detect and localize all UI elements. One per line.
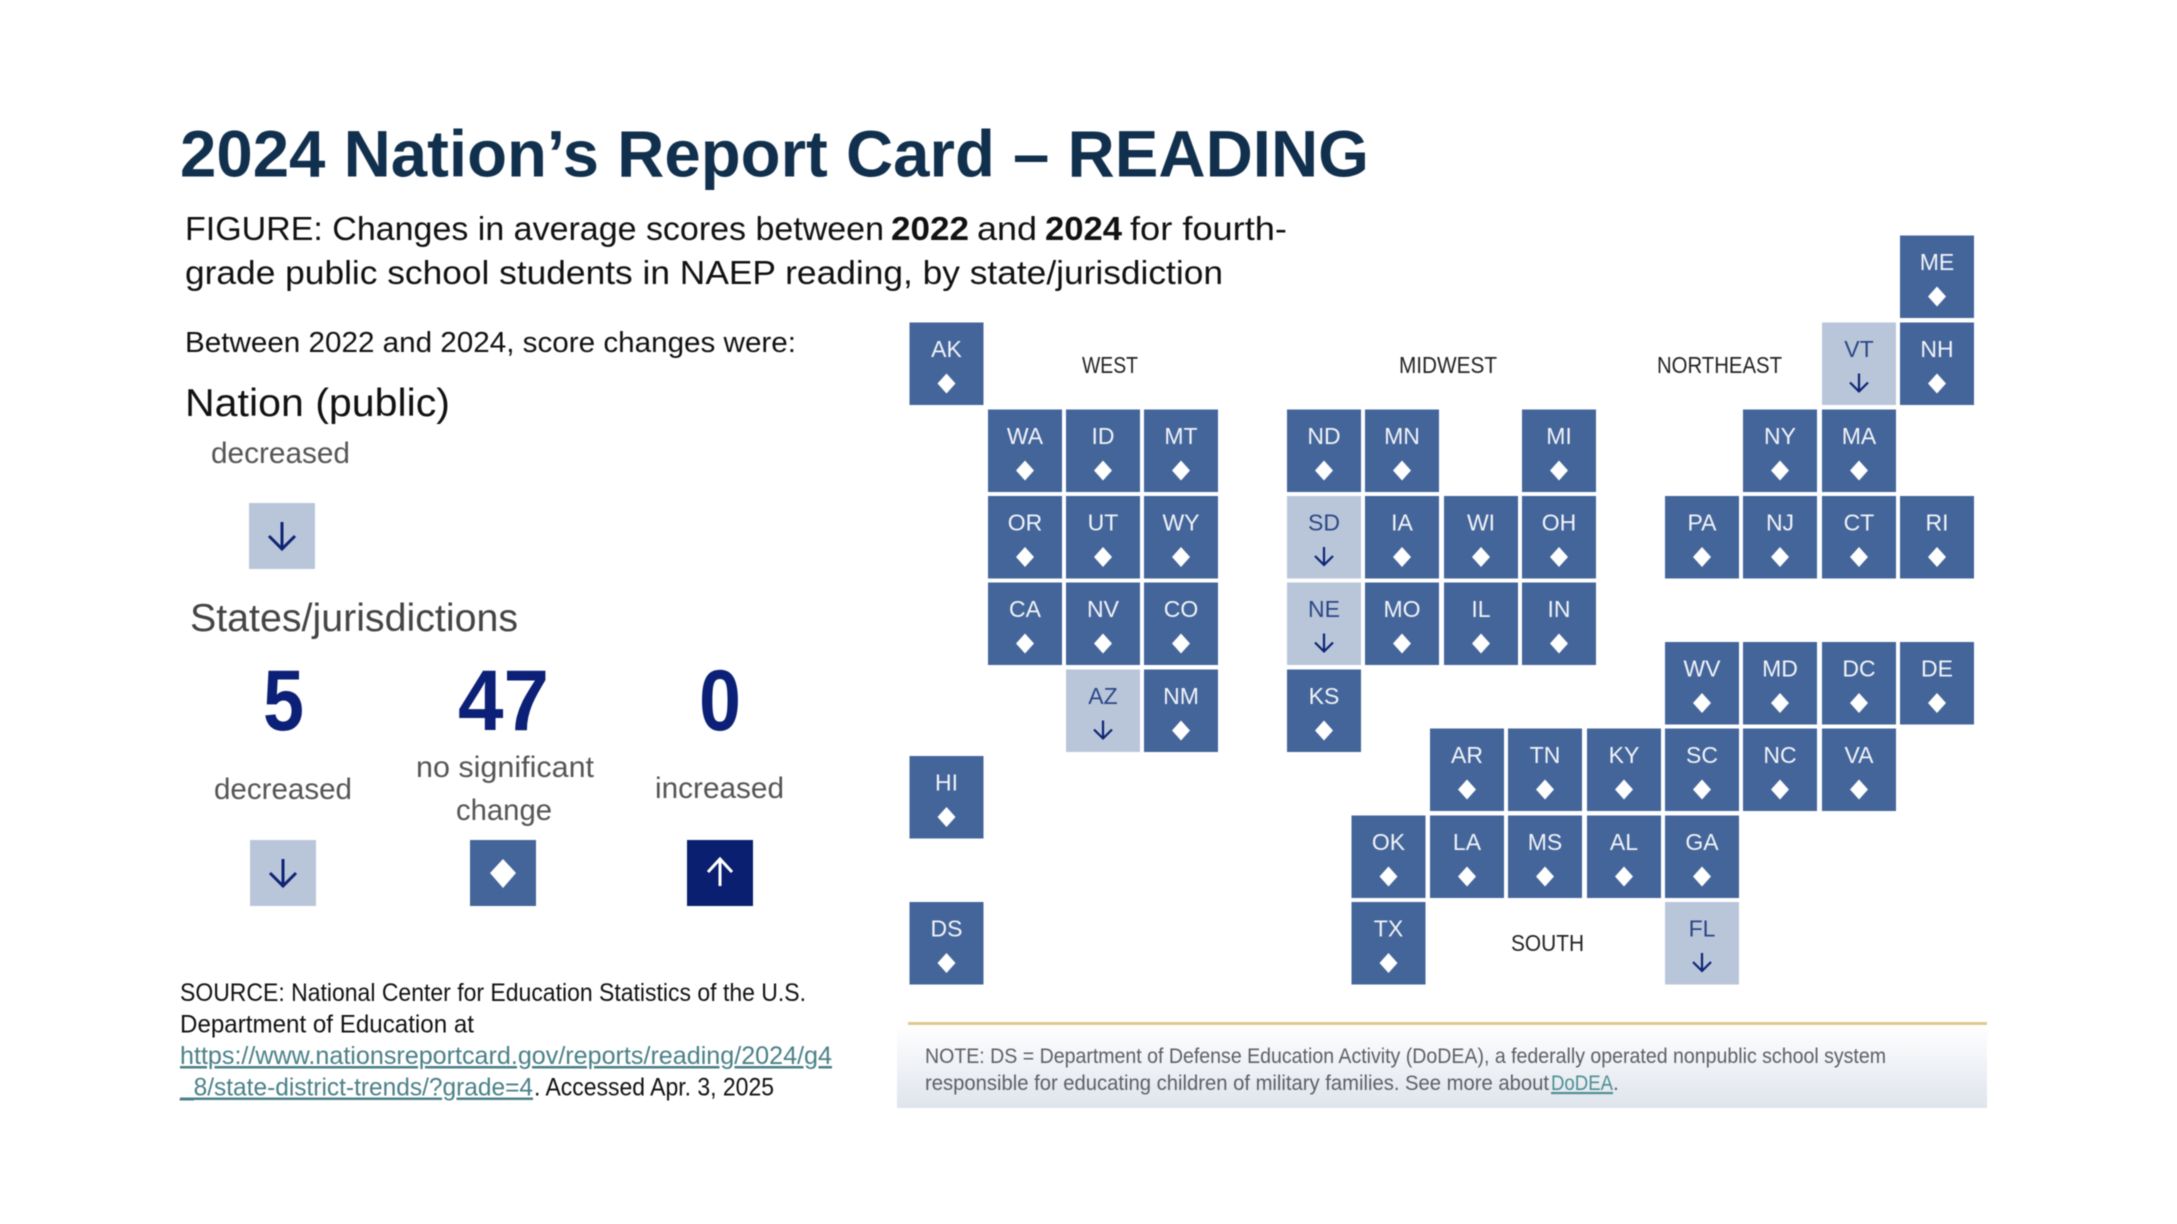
tile: NE <box>1287 582 1361 665</box>
tile: CT <box>1822 496 1896 578</box>
source citation: Department of Education at <box>180 1010 474 1038</box>
tile: MS: MS <box>1528 829 1562 855</box>
tile: KS: KS <box>1309 683 1339 709</box>
tile: DE: DE <box>1921 656 1953 682</box>
tile: OH <box>1522 496 1596 578</box>
tile: MA <box>1822 410 1896 492</box>
tile: LA <box>1430 816 1504 898</box>
tile: KY: KY <box>1609 742 1639 768</box>
tile: CA: CA <box>1009 596 1042 622</box>
label: increased: increased <box>655 772 784 805</box>
tile: WY: WY <box>1162 510 1200 536</box>
source citation: https://www.nationsreportcard.gov/reports/reading/2024/g4 <box>180 1042 832 1070</box>
icon: increased legend <box>687 840 753 906</box>
tile: AZ: AZ <box>1088 683 1118 709</box>
tile: IA: IA <box>1391 510 1414 536</box>
tile: PA <box>1665 496 1739 578</box>
tile: AK: AK <box>931 336 962 362</box>
tile: NY <box>1743 410 1817 492</box>
note text <box>925 1045 1886 1095</box>
tile: OR: OR <box>1008 510 1042 536</box>
heading: nation: Nation (public) <box>185 382 450 425</box>
tile: DS: DS <box>931 916 962 942</box>
tile: ND: ND <box>1307 423 1341 449</box>
tile: SC <box>1665 728 1739 811</box>
tile: IN <box>1522 582 1596 665</box>
tile: TN: TN <box>1530 742 1560 768</box>
subtitle: and <box>977 210 1037 247</box>
note panel <box>897 1022 1987 1108</box>
region label: south: SOUTH <box>1511 930 1584 956</box>
intro sentence: Between 2022 and 2024, score changes were: <box>185 327 796 359</box>
tile: SC: SC <box>1686 742 1718 768</box>
tile: MI <box>1522 410 1596 492</box>
tile: SD <box>1287 496 1361 578</box>
tile: DC <box>1822 642 1896 724</box>
tile: CO: CO <box>1164 596 1198 622</box>
tile: HI: HI <box>935 770 958 796</box>
tile: GA: GA <box>1685 829 1719 855</box>
number: 0 increased: 0 <box>699 653 741 749</box>
tile: MD <box>1743 642 1817 724</box>
note text: responsible for educating children of military families. See more about <box>925 1072 1549 1095</box>
tile: ID <box>1066 410 1140 492</box>
tile: MD: MD <box>1762 656 1798 682</box>
tile: VT <box>1822 322 1896 405</box>
panel: states and jurisdictions <box>190 597 784 906</box>
tile: IA <box>1365 496 1439 578</box>
subtitle: 2022 <box>891 210 969 247</box>
tile: TX <box>1352 902 1426 984</box>
tile: VA: VA <box>1845 742 1874 768</box>
tile: WY <box>1144 496 1218 578</box>
tile: NM: NM <box>1163 683 1199 709</box>
tile: RI: RI <box>1926 510 1948 536</box>
tile: OK <box>1352 816 1426 898</box>
icon: no change legend <box>470 840 536 906</box>
tile: MT <box>1144 410 1218 492</box>
tile: VT: VT <box>1844 336 1874 362</box>
tile: ME <box>1900 236 1974 318</box>
tile: VA <box>1822 728 1896 811</box>
tile: MN: MN <box>1384 423 1420 449</box>
tile: TX: TX <box>1374 916 1403 942</box>
note text: . <box>1613 1072 1619 1095</box>
label: no significant change: change <box>456 794 552 827</box>
subtitle: 2024 <box>1045 210 1123 247</box>
tile: MT: MT <box>1164 423 1198 449</box>
tile: MS <box>1508 816 1582 898</box>
tile: NH: NH <box>1920 336 1954 362</box>
title: 2024 Nation’s Report Card – READING <box>180 116 1369 190</box>
number: 47 no significant change: 47 <box>458 653 549 749</box>
tile: NM <box>1144 670 1218 752</box>
label: no significant change <box>416 751 595 827</box>
tile: MN <box>1365 410 1439 492</box>
tile: UT <box>1066 496 1140 578</box>
tile: AZ <box>1066 670 1140 752</box>
tile: ID: ID <box>1092 423 1114 449</box>
region label: west: WEST <box>1082 352 1138 378</box>
tile: NJ: NJ <box>1766 510 1794 536</box>
tile: IL: IL <box>1471 596 1491 622</box>
tile: WI: WI <box>1467 510 1495 536</box>
tile: WA: WA <box>1007 423 1044 449</box>
tile: SD: SD <box>1308 510 1340 536</box>
tile: NC <box>1743 728 1817 811</box>
tile: FL: FL <box>1689 916 1716 942</box>
tile: MI: MI <box>1546 423 1572 449</box>
label: no significant change: no significant <box>416 751 595 784</box>
tile: WI <box>1444 496 1518 578</box>
tile: KS <box>1287 670 1361 752</box>
tile: AK <box>910 322 984 405</box>
region label: northeast: NORTHEAST <box>1657 352 1782 378</box>
tile: DC: DC <box>1842 656 1876 682</box>
tile: AR <box>1430 728 1504 811</box>
tile: MO <box>1365 582 1439 665</box>
region label: midwest: MIDWEST <box>1399 352 1497 378</box>
tile: NV <box>1066 582 1140 665</box>
tile: LA: LA <box>1453 829 1482 855</box>
number: 5 decreased: 5 <box>263 653 304 749</box>
tile map <box>910 236 1974 984</box>
tile: OH: OH <box>1542 510 1576 536</box>
tile: HI <box>910 756 984 838</box>
tile: NC: NC <box>1763 742 1797 768</box>
panel: nation <box>185 382 450 569</box>
tile: FL <box>1665 902 1739 984</box>
subtitle: FIGURE: Changes in average scores between <box>185 210 884 247</box>
tile: NV: NV <box>1087 596 1120 622</box>
tile: WV: WV <box>1683 656 1721 682</box>
tile: ME: ME <box>1920 249 1954 275</box>
tile: RI <box>1900 496 1974 578</box>
label: decreased: decreased <box>214 773 352 806</box>
tile: AL: AL <box>1610 829 1638 855</box>
tile: WV <box>1665 642 1739 724</box>
tile: KY <box>1587 728 1661 811</box>
source citation: SOURCE: National Center for Education Statistics of the U.S. <box>180 979 806 1007</box>
tile: DE <box>1900 642 1974 724</box>
tile: NY: NY <box>1764 423 1796 449</box>
label: nation decreased: decreased <box>211 437 350 470</box>
tile: MA: MA <box>1842 423 1877 449</box>
tile: MO: MO <box>1383 596 1421 622</box>
tile: NJ <box>1743 496 1817 578</box>
source citation: _8/state-district-trends/?grade=4 <box>179 1074 533 1102</box>
tile: AR: AR <box>1451 742 1483 768</box>
tile: AL <box>1587 816 1661 898</box>
heading: states: States/jurisdictions <box>190 597 518 640</box>
subtitle <box>185 210 1287 291</box>
tile: IN: IN <box>1548 596 1570 622</box>
tile: GA <box>1665 816 1739 898</box>
note text: NOTE: DS = Department of Defense Education Activity (DoDEA), a federally operated nonpublic school system <box>925 1045 1886 1068</box>
tile: NH <box>1900 322 1974 405</box>
tile: CO <box>1144 582 1218 665</box>
tile: IL <box>1444 582 1518 665</box>
subtitle: grade public school students in NAEP reading, by state/jurisdiction <box>185 254 1223 291</box>
tile: UT: UT <box>1088 510 1118 536</box>
tile: PA: PA <box>1688 510 1717 536</box>
icon: nation down arrow <box>249 503 315 569</box>
tile: TN <box>1508 728 1582 811</box>
tile: OK: OK <box>1372 829 1406 855</box>
tile: OR <box>988 496 1062 578</box>
tile: NE: NE <box>1308 596 1340 622</box>
note text: DoDEA <box>1551 1072 1613 1095</box>
tile: CT: CT <box>1844 510 1874 536</box>
source citation <box>179 979 832 1102</box>
icon: decreased legend <box>250 840 316 906</box>
tile: DS <box>910 902 984 984</box>
tile: ND <box>1287 410 1361 492</box>
source citation: . Accessed Apr. 3, 2025 <box>534 1074 774 1102</box>
tile: CA <box>988 582 1062 665</box>
tile: WA <box>988 410 1062 492</box>
subtitle: for fourth- <box>1130 210 1287 247</box>
